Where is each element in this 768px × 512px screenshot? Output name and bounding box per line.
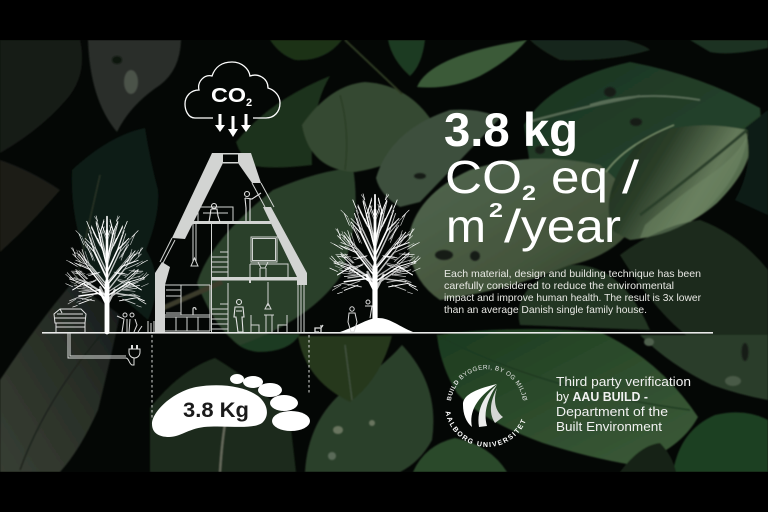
headline: m2/year [446, 200, 621, 252]
headline: m2/year: / [504, 200, 521, 252]
tree: right with mound [330, 194, 420, 332]
car [54, 309, 86, 332]
headline: CO2 eq /: 2 [522, 182, 536, 205]
verification text: Third party verification [556, 374, 691, 389]
headline: CO2 eq /: / [622, 151, 639, 203]
ground line [42, 332, 713, 334]
dashed drop lines [152, 335, 309, 420]
headline: CO2 eq /: eq [551, 151, 608, 203]
headline: m2/year: 2 [489, 200, 503, 222]
icon: footprint with 3.8 Kg [152, 374, 310, 437]
cloud label subscript: 2 [246, 97, 252, 109]
headline: m2/year: year [521, 200, 621, 252]
headline: CO2 eq /: CO [445, 151, 522, 203]
footprint label: 3.8 Kg [183, 399, 249, 422]
person: top floor seated [209, 204, 220, 222]
verification text [556, 374, 691, 434]
logo: Aalborg University BUILD seal [445, 364, 528, 447]
verification text: by AAU BUILD - [556, 389, 648, 404]
seal bottom text: AALBORG UNIVERSITET [445, 412, 526, 447]
description paragraph: than an average Danish single family house. [444, 305, 647, 316]
headline: CO2 eq / [445, 151, 639, 205]
house cross-section [155, 153, 307, 332]
person: ground floor standing [234, 300, 244, 332]
people and dog beside right tree [315, 300, 372, 332]
description paragraph: impact and improve human health. The result is 3x lower [444, 293, 702, 304]
seal top text: BUILD BYGGERI, BY OG MILJØ [446, 364, 528, 401]
headline: 3.8 kg: 3.8 kg [444, 103, 578, 156]
icon: CO2 cloud with downward arrows [185, 62, 280, 137]
mound [340, 318, 413, 332]
verification text: Built Environment [556, 419, 662, 434]
people and plants beside house [117, 313, 154, 332]
description paragraph: carefully considered to reduce the environmental [444, 281, 674, 292]
seal wings [463, 384, 503, 427]
person: top floor standing [244, 192, 261, 221]
cloud label: CO [211, 85, 246, 107]
tree: left [66, 216, 148, 332]
headline: m2/year: m [446, 200, 486, 252]
underground cable and plug [68, 333, 140, 365]
verification text: Department of the [556, 404, 668, 419]
description paragraph [444, 269, 702, 316]
droplets [112, 56, 748, 460]
description paragraph: Each material, design and building technique has been [444, 269, 701, 280]
